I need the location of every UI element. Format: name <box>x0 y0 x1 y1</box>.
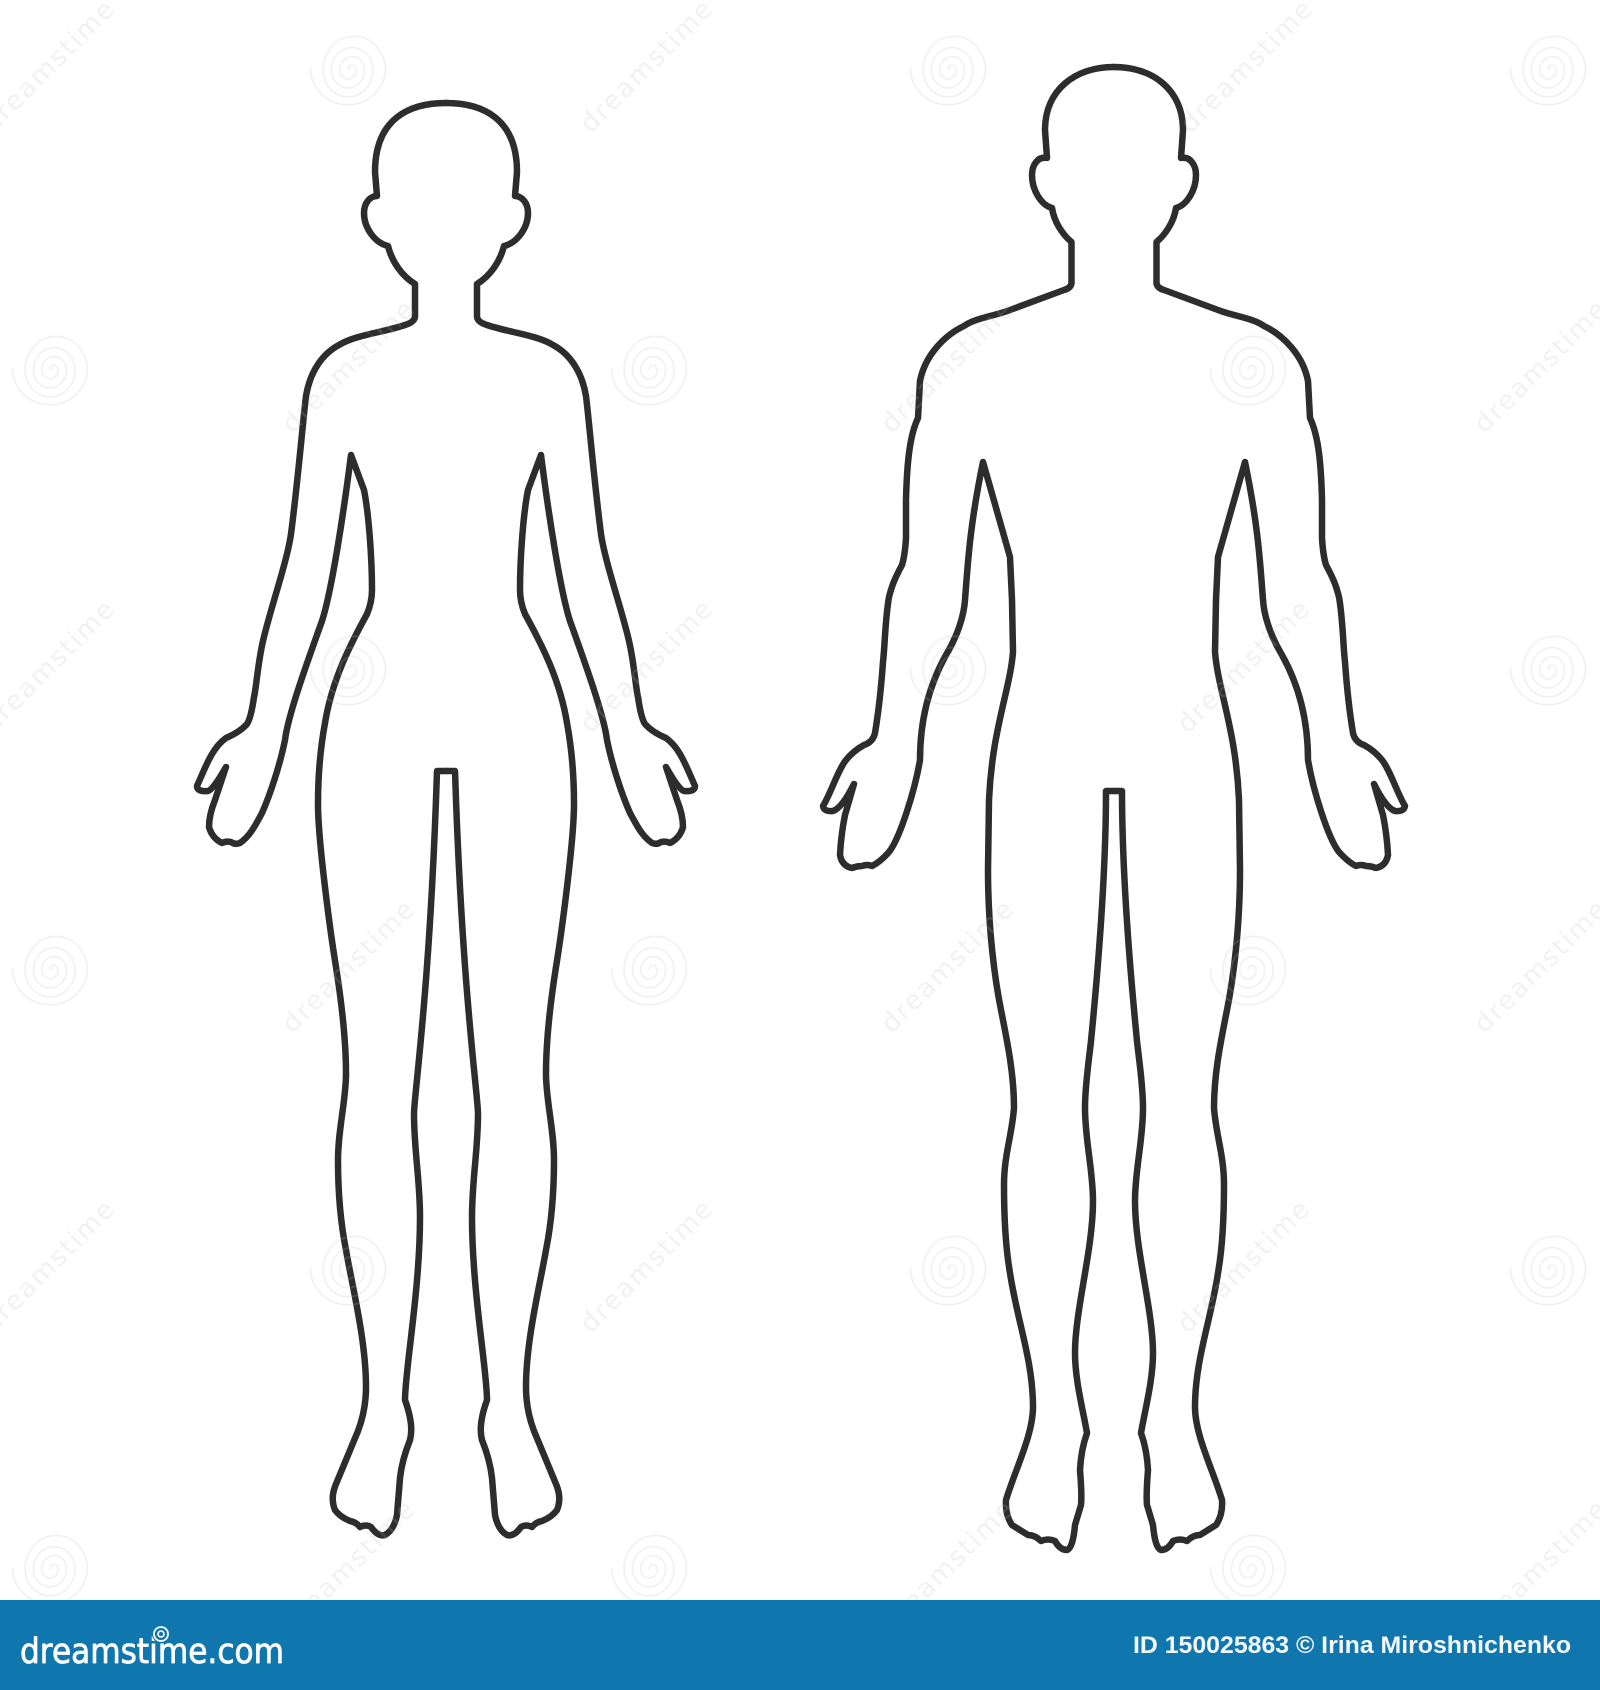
footer credit: ID 150025863 © Irina Miroshnichenko <box>1133 1632 1571 1659</box>
figure: man outline <box>823 67 1405 1550</box>
footer bar <box>0 1600 1600 1690</box>
man left half <box>823 67 1114 1550</box>
watermark text: dreamstime <box>1171 593 1317 739</box>
watermark text: dreamstime <box>875 293 1021 439</box>
watermark text: dreamstime <box>276 893 422 1039</box>
icon: spiral <box>152 1625 170 1643</box>
figure: woman outline <box>197 103 695 1535</box>
man right half <box>1114 67 1405 1550</box>
watermark text: dreamstime <box>1171 1193 1317 1339</box>
watermark text: dreamstime <box>574 593 720 739</box>
footer logo: dreamstime.com <box>20 1632 284 1672</box>
woman left half <box>197 103 446 1535</box>
woman right half <box>446 103 695 1535</box>
watermark text: dreamstime <box>276 1493 422 1639</box>
watermark text: dreamstime <box>875 893 1021 1039</box>
watermark text: dreamstime <box>875 1493 1021 1639</box>
watermark text: dreamstime <box>276 293 422 439</box>
watermark text: dreamstime <box>574 1193 720 1339</box>
